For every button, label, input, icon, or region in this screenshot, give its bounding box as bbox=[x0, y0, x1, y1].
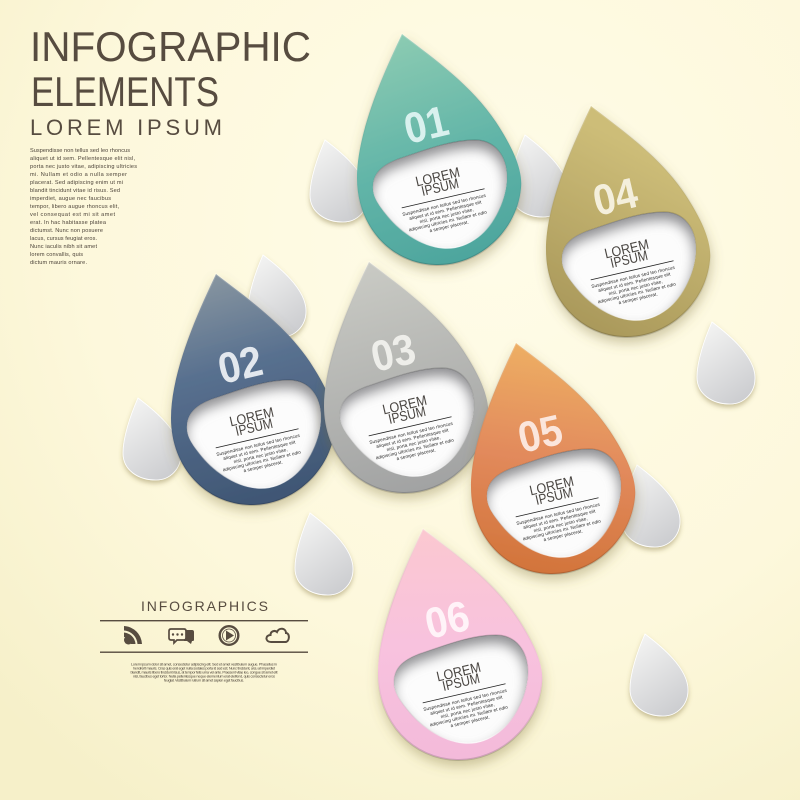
drop 02: aliquet ut id sem. Pellentesque elit bbox=[223, 439, 297, 461]
footer small text: hendrerit mauris. Cras quis erat eget nulla sodales porta id sed est. Nunc tincidunt, arcu at imperdiet bbox=[133, 666, 276, 670]
small drop 6 bbox=[697, 322, 755, 404]
intro text block: mi. Nullam et odio a nulla semper bbox=[30, 172, 127, 178]
drop 04: Suspendisse non tellus sed leo rhoncus bbox=[591, 265, 676, 289]
drop 01: Suspendisse non tellus sed leo rhoncus bbox=[402, 193, 487, 217]
small drop 5 bbox=[295, 513, 353, 595]
drop 04: a semper placerat. bbox=[618, 291, 658, 305]
drop 05: IPSUM bbox=[534, 484, 574, 508]
small drop 8 bbox=[630, 634, 688, 716]
title: ELEMENTS bbox=[31, 68, 219, 115]
drop 03: a semper placerat. bbox=[396, 447, 436, 461]
drop 03: LOREM bbox=[381, 392, 428, 417]
drop 06 bbox=[378, 529, 542, 760]
intro text block: aliquet ut id sem. Pellentesque elit nisl, bbox=[30, 156, 135, 162]
drop 05: LOREM bbox=[528, 473, 575, 498]
drop 02: adipiscing ultricies mi. Nullam et odio bbox=[222, 449, 302, 472]
intro text block: Nunc iaculis nibh sit amet bbox=[30, 244, 97, 250]
icon: rss bbox=[124, 626, 142, 644]
drop 06: adipiscing ultricies mi. Nullam et odio bbox=[429, 704, 509, 727]
drop 03: Suspendisse non tellus sed leo rhoncus bbox=[369, 421, 454, 445]
drop 03: IPSUM bbox=[387, 403, 427, 427]
small drop 3 bbox=[248, 255, 306, 337]
drop 05 bbox=[471, 343, 635, 574]
drop 03: aliquet ut id sem. Pellentesque elit bbox=[376, 427, 450, 449]
drop 03: 03 bbox=[367, 325, 420, 382]
footer small text: blandit, mauris libero tincidunt risus, at tempor felis urna vel ante. Praesent vitae leo, congue sit amet elit bbox=[130, 670, 278, 674]
footer small text: feugiat. Vestibulum rutrum sit amet sapien eget faucibus. bbox=[164, 678, 244, 682]
drop 02: a semper placerat. bbox=[243, 459, 283, 473]
intro text block: erat. In hac habitasse platea bbox=[30, 220, 107, 226]
drop 02 bbox=[171, 274, 335, 505]
drop 05: adipiscing ultricies mi. Nullam et odio bbox=[522, 518, 602, 541]
drop 02: IPSUM bbox=[234, 415, 274, 439]
drop 04 bbox=[546, 106, 710, 337]
drop 01: aliquet ut id sem. Pellentesque elit bbox=[409, 199, 483, 221]
drop 02: 02 bbox=[214, 337, 267, 394]
footer small text: nisi, faucibus eget tortor. Nulla pellentesque neque elementum erat eleifend, quis consectetur eros bbox=[133, 674, 275, 678]
drop 06: LOREM bbox=[435, 659, 482, 684]
drop 01: IPSUM bbox=[420, 175, 460, 199]
footer heading: INFOGRAPHICS bbox=[141, 598, 268, 614]
icon: play bbox=[220, 626, 238, 645]
intro text block: lorem convallis, quis bbox=[30, 252, 83, 258]
footer small text bbox=[130, 662, 278, 682]
intro text block: porta nec justo vitae, adipiscing ultricies bbox=[30, 164, 137, 170]
small drop 2 bbox=[510, 135, 568, 217]
drop 06: Suspendisse non tellus sed leo rhoncus bbox=[423, 688, 508, 712]
drop 03: adipiscing ultricies mi. Nullam et odio bbox=[375, 437, 455, 460]
intro text block: vel consequat est mi sit amet bbox=[30, 212, 115, 218]
footer rules and icons bbox=[100, 620, 308, 653]
drop 01: a semper placerat. bbox=[429, 219, 469, 233]
intro text block: blandit tincidunt vitae id risus. Sed bbox=[30, 188, 120, 194]
drop 01: nisl, porta nec justo vitae, bbox=[419, 207, 474, 224]
intro text block: tempor, libero augue rhoncus elit, bbox=[30, 204, 119, 210]
drop 03: nisl, porta nec justo vitae, bbox=[386, 435, 441, 452]
intro text block: placerat. Sed adipiscing enim ut mi bbox=[30, 180, 123, 186]
icon: chat bbox=[169, 629, 194, 644]
title bbox=[30, 23, 311, 140]
drop 04: LOREM bbox=[603, 236, 650, 261]
small drop 7 bbox=[622, 465, 680, 547]
small drop 4 bbox=[123, 398, 181, 480]
intro text block: dictumst. Nunc non posuere bbox=[30, 228, 103, 234]
drop 04: adipiscing ultricies mi. Nullam et odio bbox=[597, 281, 677, 304]
drop 06: aliquet ut id sem. Pellentesque elit bbox=[430, 694, 504, 716]
drop 04: 04 bbox=[589, 169, 642, 226]
drop 04: aliquet ut id sem. Pellentesque elit bbox=[598, 271, 672, 293]
drop 01: LOREM bbox=[414, 164, 461, 189]
drop 02: LOREM bbox=[228, 404, 275, 429]
drop 06: a semper placerat. bbox=[450, 714, 490, 728]
drop 03 bbox=[324, 262, 488, 493]
drop 05: a semper placerat. bbox=[543, 528, 583, 542]
drop 05: 05 bbox=[514, 406, 567, 463]
intro text block: imperdiet, augue nec faucibus bbox=[30, 196, 111, 202]
title: LOREM IPSUM bbox=[30, 115, 222, 140]
drop 04: nisl, porta nec justo vitae, bbox=[608, 279, 663, 296]
icon: cloud bbox=[266, 629, 289, 642]
drop 05: nisl, porta nec justo vitae, bbox=[533, 516, 588, 533]
drop 01: 01 bbox=[400, 97, 453, 154]
drop 05: aliquet ut id sem. Pellentesque elit bbox=[523, 508, 597, 530]
drop 06: nisl, porta nec justo vitae, bbox=[440, 702, 495, 719]
drop 05: Suspendisse non tellus sed leo rhoncus bbox=[516, 502, 601, 526]
footer small text: Lorem ipsum dolor sit amet, consectetur adipiscing elit. Sed et amet vestibulum augue. Phasellus in bbox=[131, 662, 277, 666]
drop 02: nisl, porta nec justo vitae, bbox=[233, 447, 288, 464]
intro text block: dictum mauris ornare. bbox=[30, 260, 87, 266]
intro text block: lacus, cursus feugiat eros. bbox=[30, 236, 97, 242]
drop 01: adipiscing ultricies mi. Nullam et odio bbox=[408, 209, 488, 232]
drop 06: 06 bbox=[421, 592, 474, 649]
drop 04: IPSUM bbox=[609, 247, 649, 271]
drop 01 bbox=[357, 34, 521, 265]
drop 02: Suspendisse non tellus sed leo rhoncus bbox=[216, 433, 301, 457]
title: INFOGRAPHIC bbox=[30, 23, 311, 70]
intro text block bbox=[30, 148, 137, 266]
intro text block: Suspendisse non tellus sed leo rhoncus bbox=[30, 148, 130, 154]
small drop 1 bbox=[310, 140, 368, 222]
drop 06: IPSUM bbox=[441, 670, 481, 694]
